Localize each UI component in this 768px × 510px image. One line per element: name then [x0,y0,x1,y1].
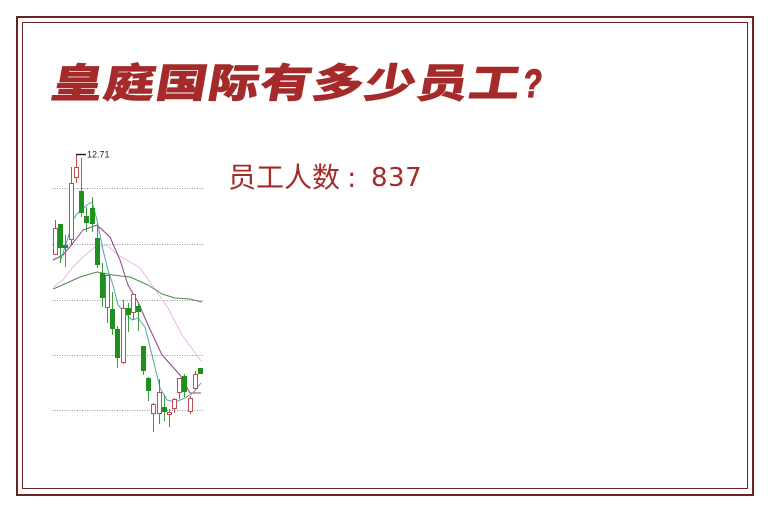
candle bodies: rising [54,168,198,414]
candle bodies: falling [58,191,203,412]
moving average lines [53,202,202,402]
title: 皇庭国际有多少员工 [48,61,526,106]
high price marker: 12.71 [87,150,110,160]
stat: employee count [228,161,422,194]
stock candlestick chart [52,150,203,432]
stat: employee count: : [347,161,356,194]
candle wicks: falling [60,158,200,421]
stat: employee count: 837 [371,163,422,193]
high price marker [76,150,110,160]
title: ? [521,61,544,106]
grid lines [52,188,203,410]
stat: employee count: 员工人数 [228,161,340,194]
candle wicks: rising [56,155,196,432]
